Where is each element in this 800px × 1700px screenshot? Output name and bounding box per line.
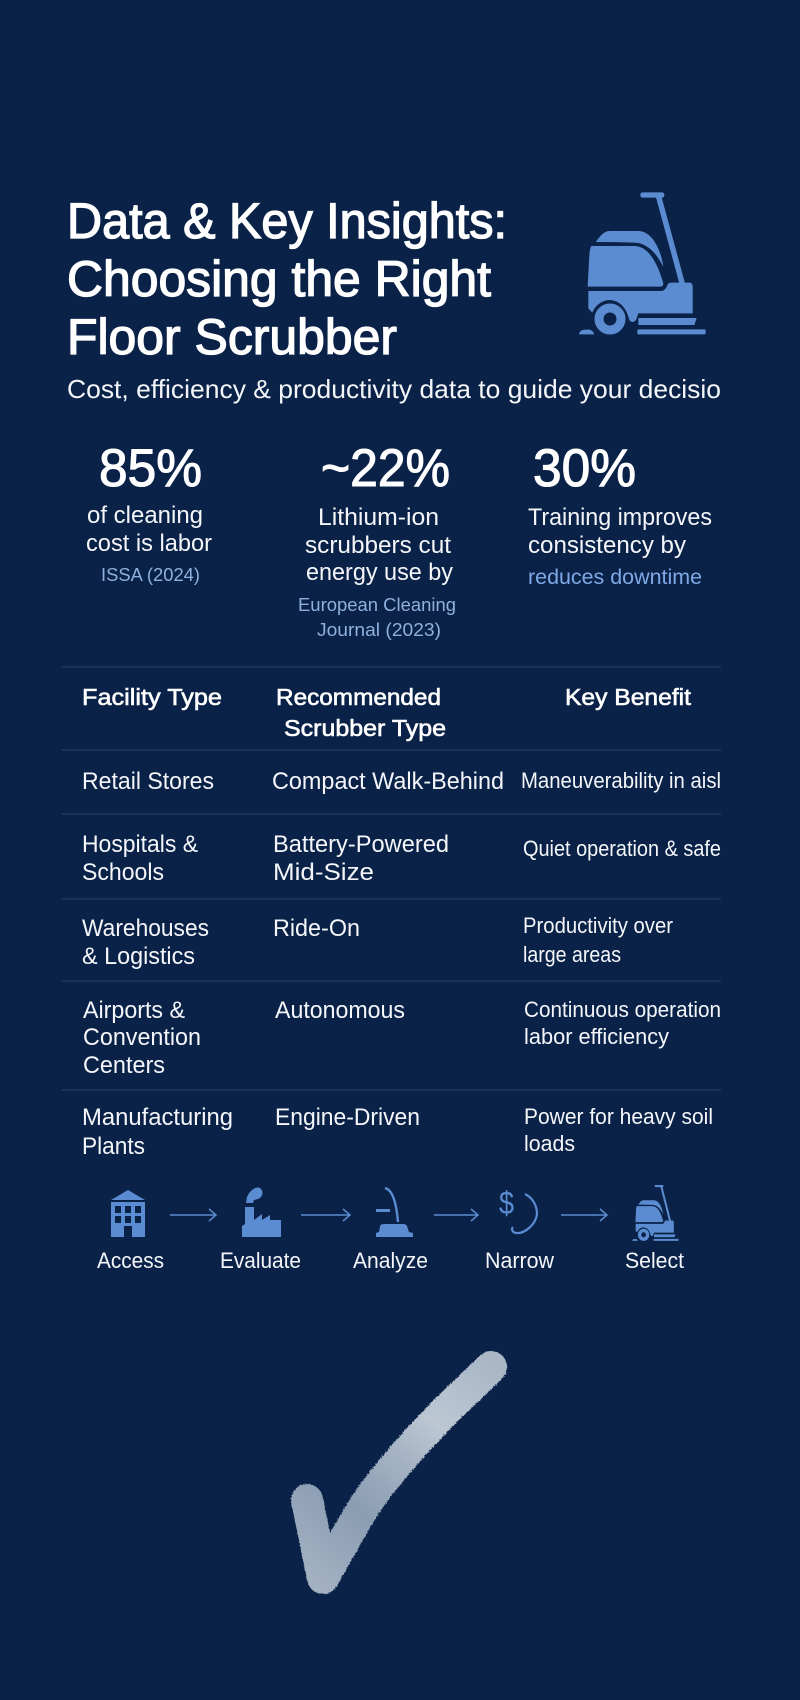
- row: warehouses and logistics: Warehouses: [82, 915, 209, 942]
- row: manufacturing plants: Engine-Driven: [275, 1104, 420, 1131]
- icon: small floor scrubber: [632, 1185, 679, 1241]
- row: airports and convention centers: labor efficiency: [524, 1024, 670, 1049]
- stat: 30% training: consistency by: [528, 532, 686, 559]
- step: Evaluate: Evaluate: [220, 1248, 301, 1273]
- stat: 30% training: 30%: [533, 439, 636, 498]
- row: manufacturing plants: Power for heavy soil: [524, 1104, 713, 1129]
- row: hospitals and schools: Mid-Size: [273, 859, 374, 886]
- title: [67, 193, 507, 365]
- table: facility type recommendations: [62, 667, 721, 1160]
- row: warehouses and logistics: [82, 913, 673, 970]
- icon: brush check mark: [307, 1367, 491, 1578]
- stat: 85% labor: cost is labor: [86, 530, 212, 557]
- arrow: [301, 1209, 350, 1221]
- table header: Recommended: [276, 684, 441, 710]
- step: Access: Access: [97, 1248, 164, 1273]
- step: Analyze: [353, 1188, 428, 1273]
- row: manufacturing plants: Manufacturing: [82, 1104, 233, 1131]
- stat: 85% labor: 85%: [99, 439, 202, 498]
- stat: 22% energy: scrubbers cut: [305, 532, 451, 559]
- row: hospitals and schools: [82, 831, 721, 886]
- row: retail stores: Compact Walk-Behind: [272, 768, 504, 795]
- table header: Facility Type: [82, 684, 222, 710]
- row: airports and convention centers: Autonomous: [275, 997, 405, 1024]
- row: hospitals and schools: Hospitals &: [82, 831, 198, 858]
- stat: 22% energy: Journal (2023): [317, 619, 441, 640]
- row: airports and convention centers: Continuous operation: [524, 997, 721, 1022]
- row: hospitals and schools: Battery-Powered: [273, 831, 449, 858]
- row: warehouses and logistics: & Logistics: [82, 943, 195, 970]
- row: warehouses and logistics: Productivity over: [523, 913, 673, 938]
- icon: building: [111, 1190, 145, 1237]
- icon: scrubber head: [376, 1188, 413, 1237]
- arrow: [170, 1209, 216, 1221]
- step: Access: [97, 1190, 164, 1273]
- title: Data & Key Insights:: [67, 193, 507, 249]
- row: hospitals and schools: Quiet operation & safe: [523, 836, 721, 861]
- icon: factory: [242, 1187, 281, 1237]
- stat: 30% training: [528, 439, 712, 589]
- row: manufacturing plants: loads: [524, 1131, 575, 1156]
- table header: Key Benefit: [565, 684, 692, 710]
- arrow: [434, 1209, 478, 1221]
- row: hospitals and schools: Schools: [82, 859, 164, 886]
- step: Analyze: Analyze: [353, 1248, 428, 1273]
- table header: [82, 684, 692, 741]
- step: Narrow: [485, 1185, 554, 1273]
- row: manufacturing plants: Plants: [82, 1133, 145, 1160]
- stat: 85% labor: ISSA (2024): [101, 564, 200, 585]
- stat: 22% energy: [298, 439, 456, 640]
- table header: Scrubber Type: [284, 715, 446, 741]
- stat: 22% energy: European Cleaning: [298, 594, 456, 615]
- arrow: [561, 1209, 607, 1221]
- row: retail stores: [82, 768, 721, 795]
- row: retail stores: Maneuverability in aisl: [521, 768, 721, 793]
- stat: 30% training: reduces downtime: [528, 565, 702, 589]
- stat: 85% labor: [86, 439, 212, 585]
- row: manufacturing plants: [82, 1104, 713, 1160]
- subtitle: Cost, efficiency & productivity data to guide your decisio: [67, 374, 721, 404]
- title: Choosing the Right: [67, 251, 491, 307]
- icon: dollar and curve: $: [499, 1185, 514, 1221]
- stat: 85% labor: of cleaning: [87, 502, 203, 529]
- step: Select: Select: [625, 1248, 684, 1273]
- stat: 22% energy: ~22%: [321, 439, 450, 498]
- row: airports and convention centers: Convention: [83, 1024, 201, 1051]
- row: warehouses and logistics: large areas: [523, 942, 621, 967]
- stat: 22% energy: Lithium-ion: [318, 504, 439, 531]
- row: warehouses and logistics: Ride-On: [273, 915, 360, 942]
- step: Narrow: Narrow: [485, 1248, 554, 1273]
- title: Floor Scrubber: [67, 309, 397, 365]
- step: Evaluate: [220, 1187, 301, 1273]
- row: airports and convention centers: Airports &: [83, 997, 185, 1024]
- row: airports and convention centers: [83, 997, 721, 1079]
- icon: floor scrubber: [579, 192, 706, 334]
- process flow: [97, 1185, 684, 1273]
- stat: 22% energy: energy use by: [306, 559, 453, 586]
- row: airports and convention centers: Centers: [83, 1052, 165, 1079]
- step: Select: [625, 1185, 684, 1273]
- row: retail stores: Retail Stores: [82, 768, 214, 795]
- stat: 30% training: Training improves: [528, 504, 712, 531]
